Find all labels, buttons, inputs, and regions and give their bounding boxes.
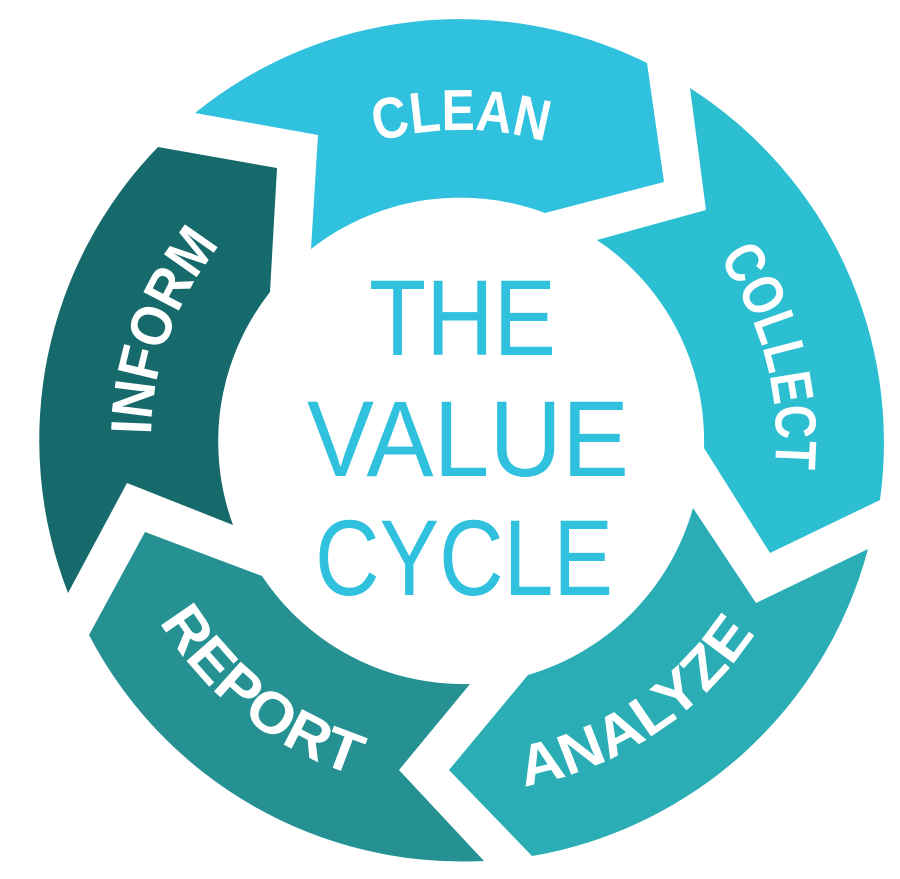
- segment: analyze: [449, 508, 868, 856]
- label: inform: INFORM: [111, 224, 218, 432]
- title: the value cycle: THE: [369, 257, 556, 378]
- title: the value cycle: VALUE: [307, 378, 629, 499]
- title: the value cycle: [307, 257, 629, 618]
- label: collect: COLLECT: [726, 244, 816, 470]
- segment: inform: [39, 147, 277, 593]
- segment: report: [89, 532, 484, 862]
- label: report: REPORT: [161, 602, 368, 771]
- segment: clean: [195, 19, 664, 249]
- segment: collect: [597, 88, 884, 553]
- label: clean: CLEAN: [373, 90, 551, 140]
- label: analyze: ANALYZE: [526, 612, 754, 787]
- title: the value cycle: CYCLE: [315, 497, 613, 618]
